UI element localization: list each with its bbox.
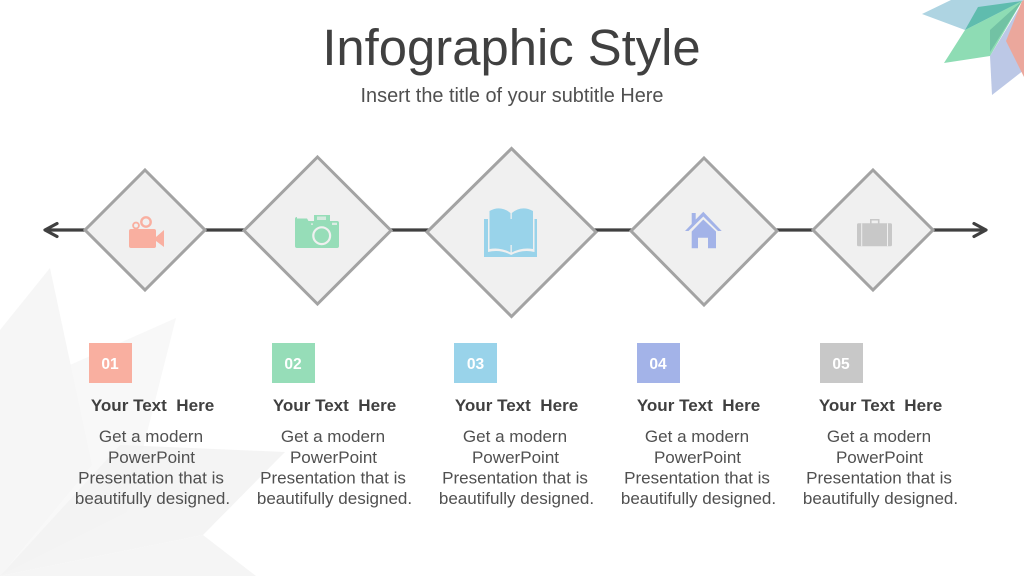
column 3: Presentation that is [442, 468, 588, 488]
column 3: beautifully designed. [439, 489, 594, 508]
timeline arrow [45, 224, 986, 236]
column 4: 04 [649, 356, 667, 373]
column 2: Get a modern [281, 427, 385, 446]
column 5: Your Text Here [819, 396, 942, 415]
diamond 1 [85, 170, 205, 290]
column 4: PowerPoint [654, 448, 741, 467]
column 3: Your Text Here [455, 396, 578, 415]
icon: camera [295, 215, 339, 248]
column 4: Get a modern [645, 427, 749, 446]
column 5: beautifully designed. [803, 489, 958, 508]
column 1: Presentation that is [78, 468, 224, 488]
column 1: Get a modern [99, 427, 203, 446]
diamond 5 [813, 170, 933, 290]
column 1: PowerPoint [108, 448, 195, 467]
icon: video camera [129, 217, 164, 248]
column 5: Presentation that is [806, 468, 952, 488]
column 2: 02 [284, 356, 302, 373]
column 1 [75, 343, 230, 508]
decoration: grey polygons bottom left [0, 268, 285, 576]
column 3: Get a modern [463, 427, 567, 446]
column 1: Your Text Here [91, 396, 214, 415]
subtitle: Insert the title of your subtitle Here [361, 85, 663, 107]
column 5 [803, 343, 958, 508]
column 5: 05 [832, 356, 850, 373]
column 5: Get a modern [827, 427, 931, 446]
column 2: Your Text Here [273, 396, 396, 415]
column 4 [621, 343, 776, 508]
column 2 [257, 343, 412, 508]
decoration: coloured polygons top right [922, 0, 1024, 95]
title: Infographic Style [322, 19, 701, 76]
column 5: PowerPoint [836, 448, 923, 467]
icon: house [685, 212, 722, 248]
diamond 4 [631, 158, 777, 305]
column 2: Presentation that is [260, 468, 406, 488]
column 1: beautifully designed. [75, 489, 230, 508]
diamond 3 [427, 148, 596, 316]
column 2: beautifully designed. [257, 489, 412, 508]
column 2: PowerPoint [290, 448, 377, 467]
column 3: PowerPoint [472, 448, 559, 467]
column 3 [439, 343, 594, 508]
column 3: 03 [467, 356, 484, 373]
column 4: Your Text Here [637, 396, 760, 415]
icon: briefcase [857, 219, 892, 246]
column 4: Presentation that is [624, 468, 770, 488]
column 1: 01 [101, 356, 119, 373]
icon: open book [484, 208, 537, 257]
diamond 2 [244, 157, 391, 304]
column 4: beautifully designed. [621, 489, 776, 508]
